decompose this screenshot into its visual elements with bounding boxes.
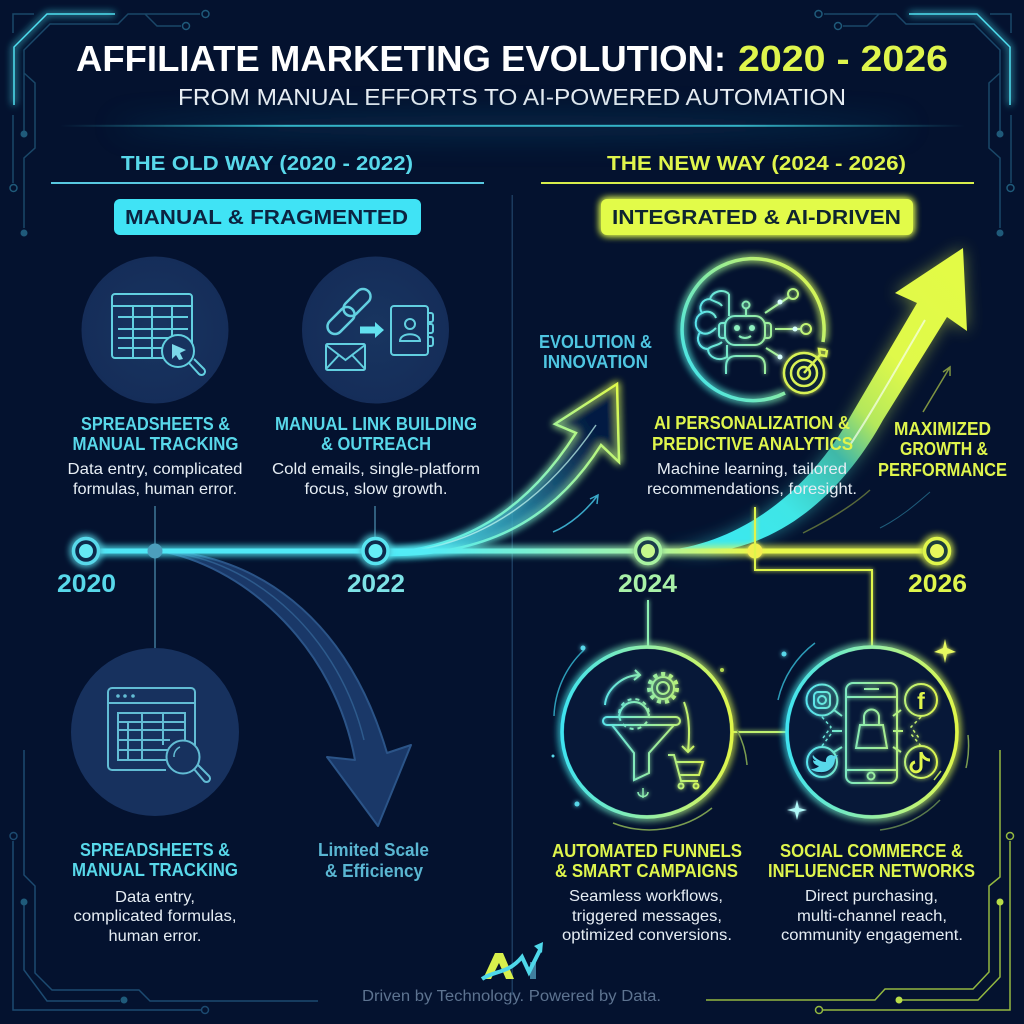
icon: spreadsheet with cursor	[82, 256, 228, 404]
panel: spreadsheets upper	[68, 256, 242, 498]
connectors: old way	[155, 506, 375, 650]
text: social heading: SOCIAL COMMERCE &	[780, 841, 963, 861]
text: spreadsheets heading	[72, 414, 238, 454]
year: 2020: 2020	[57, 570, 116, 598]
text: social description: Direct purchasing,	[805, 888, 938, 905]
pill: integrated and AI-driven: INTEGRATED & AI-DRIVEN	[612, 206, 901, 229]
text: AI description	[647, 461, 857, 498]
text: funnels description: triggered messages,	[572, 908, 722, 925]
text: spreadsheets description: Data entry, complicated	[68, 461, 242, 478]
panel: AI personalization	[647, 259, 857, 498]
text: AI heading: PREDICTIVE ANALYTICS	[652, 434, 853, 454]
pill: integrated and AI-driven	[601, 199, 913, 235]
text: lower spreadsheets heading: SPREADSHEETS &	[80, 840, 230, 860]
icon: link, envelope, contact book	[302, 256, 449, 404]
icon: phone with social bubbles	[806, 683, 937, 783]
node: midpoint new	[748, 544, 762, 558]
arrow: evolution upward	[385, 384, 619, 555]
orbit sparkles: social	[778, 639, 969, 830]
text: social description	[781, 888, 963, 944]
text: AI description: recommendations, foresight.	[647, 481, 857, 498]
timeline	[74, 538, 950, 564]
icon: funnel with gears and cart	[603, 670, 703, 798]
text: lower spreadsheets description: Data entry,	[115, 889, 195, 906]
subtitle: FROM MANUAL EFFORTS TO AI-POWERED AUTOMATION	[178, 84, 846, 110]
year: 2024: 2024	[618, 570, 677, 598]
callout: evolution and innovation: INNOVATION	[543, 352, 648, 372]
pill: manual and fragmented: MANUAL & FRAGMENTED	[125, 206, 408, 229]
year: 2026: 2026	[908, 570, 967, 598]
callout: evolution and innovation	[539, 332, 652, 372]
node: 2020	[74, 538, 98, 564]
text: social heading	[768, 841, 975, 881]
text: link building heading: & OUTREACH	[321, 434, 431, 454]
connectors: new way	[648, 507, 872, 732]
callout: limited scale: Limited Scale	[318, 840, 429, 860]
text: spreadsheets heading: SPREADSHEETS &	[81, 414, 230, 434]
text: link building description: Cold emails, single-platform	[272, 461, 480, 478]
title: 2020 - 2026	[738, 38, 948, 79]
callout: limited scale: & Efficiency	[325, 861, 423, 881]
text: link building heading	[275, 414, 477, 454]
callout: maximized growth: PERFORMANCE	[878, 460, 1007, 480]
icon: brain, robot and nodes	[696, 289, 811, 374]
icon: target	[784, 349, 827, 393]
text: funnels heading: AUTOMATED FUNNELS	[552, 841, 742, 861]
text: spreadsheets description	[68, 461, 242, 498]
callout: maximized growth: GROWTH &	[900, 439, 988, 459]
icon: facebook f: f	[917, 688, 925, 714]
icon: tiktok note	[911, 752, 930, 772]
text: lower spreadsheets heading: MANUAL TRACKING	[72, 860, 238, 880]
panel: spreadsheets lower	[71, 648, 239, 945]
logo	[482, 942, 543, 979]
title: AFFILIATE MARKETING EVOLUTION:	[76, 38, 726, 79]
text: lower spreadsheets description	[74, 889, 236, 945]
icon ring: social	[787, 647, 957, 817]
heading: the old way: THE OLD WAY (2020 - 2022)	[121, 152, 413, 175]
text: social description: community engagement.	[781, 927, 963, 944]
node: 2024	[636, 538, 660, 564]
callout: limited scale	[318, 840, 429, 881]
text: social description: multi-channel reach,	[797, 908, 947, 925]
text: AI description: Machine learning, tailored	[657, 461, 847, 478]
header divider	[60, 114, 965, 138]
pill: manual and fragmented	[114, 199, 421, 235]
text: funnels heading: & SMART CAMPAIGNS	[555, 861, 738, 881]
text: spreadsheets heading: MANUAL TRACKING	[72, 434, 238, 454]
node: midpoint old	[148, 544, 162, 558]
text: AI heading: AI PERSONALIZATION &	[654, 413, 850, 433]
footer: Driven by Technology. Powered by Data.	[362, 988, 661, 1005]
circuit: bottom-left corner	[10, 750, 318, 1014]
text: AI heading	[652, 413, 853, 454]
text: funnels description: Seamless workflows,	[569, 888, 723, 905]
text: funnels description	[562, 888, 732, 944]
text: social heading: INFLUENCER NETWORKS	[768, 861, 975, 881]
callout: evolution and innovation: EVOLUTION &	[539, 332, 652, 352]
callout: maximized growth: MAXIMIZED	[894, 419, 991, 439]
text: funnels description: optimized conversions.	[562, 927, 732, 944]
text: spreadsheets description: formulas, human error.	[73, 481, 237, 498]
text: lower spreadsheets heading	[72, 840, 238, 880]
circuit: top-right corner	[815, 10, 1014, 236]
heading: the new way: THE NEW WAY (2024 - 2026)	[607, 152, 906, 175]
callout: maximized growth	[878, 419, 1007, 480]
text: lower spreadsheets description: human error.	[108, 928, 202, 945]
text: funnels heading	[552, 841, 742, 881]
glints: neural nodes	[778, 300, 798, 360]
node: 2022	[363, 538, 388, 564]
panel: social commerce	[768, 639, 975, 944]
text: lower spreadsheets description: complicated formulas,	[74, 908, 236, 925]
text: link building description	[272, 461, 480, 498]
orbit sparkles: funnel	[552, 646, 747, 830]
icon ring: AI	[682, 259, 824, 401]
text: link building heading: MANUAL LINK BUILDING	[275, 414, 477, 434]
icon: browser table with magnifier	[71, 648, 239, 816]
circuit: top-left corner	[10, 10, 209, 236]
year: 2022: 2022	[347, 570, 405, 598]
arrow: limited scale downward	[165, 551, 411, 826]
arrow: maximized growth upward	[660, 248, 967, 553]
node: 2026	[924, 538, 950, 564]
column divider	[512, 195, 513, 995]
icon ring: funnel	[562, 647, 732, 817]
icon: twitter bird	[811, 755, 838, 772]
panel: automated funnels	[552, 646, 747, 944]
text: link building description: focus, slow growth.	[304, 481, 448, 498]
panel: manual link building	[272, 256, 480, 498]
circuit: bottom-right corner	[706, 750, 1014, 1014]
